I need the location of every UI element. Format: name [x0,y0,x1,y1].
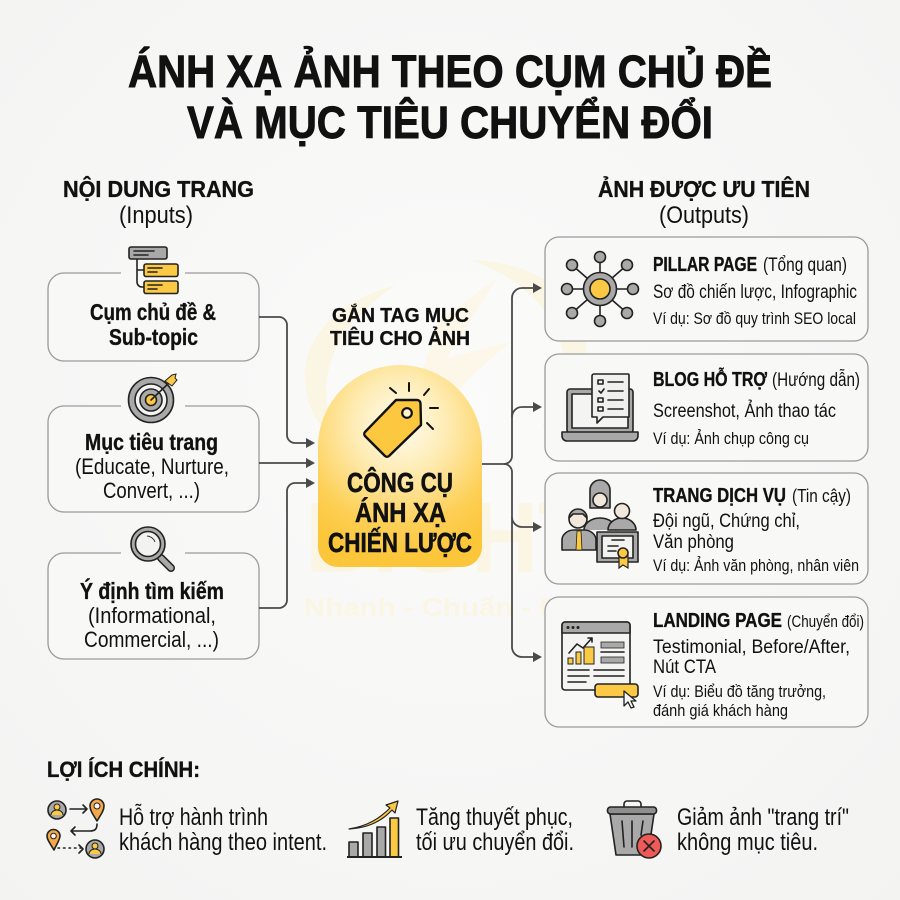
panel: page goal input [48,374,259,512]
panel: service page output: TRANG DỊCH VỤ [653,485,786,507]
panel: service page output: (Tin cậy) [792,486,851,506]
benefit: less decorative images: Giảm ảnh "trang trí" [677,804,849,831]
heading: key benefits: LỢI ÍCH CHÍNH: [47,757,200,782]
benefit: customer journey: khách hàng theo intent. [119,829,327,856]
benefit: conversion: tối ưu chuyển đổi. [416,829,574,856]
title: ÁNH XẠ ẢNH THEO CỤM CHỦ ĐỀ [128,46,772,97]
arrow: inputs to center [259,317,315,608]
panel: pillar page output [545,237,868,341]
icon: web page with chart and button [562,622,638,708]
heading: outputs: (Outputs) [659,202,749,229]
panel: support blog output: (Hướng dẫn) [772,369,860,391]
panel: central mapping tool: CHIẾN LƯỢC [328,527,472,558]
icon: team and certificate [562,480,638,568]
icon: hub network [562,252,638,326]
panel: service page output: Văn phòng [653,532,734,553]
icon: trash bin with cross [608,801,661,858]
panel: support blog output: Screenshot, Ảnh thao tác [653,400,836,422]
icon: hierarchy [129,247,178,294]
panel: landing page output: Ví dụ: Biểu đồ tăng trưởng, [653,682,826,701]
panel: topic cluster input: Sub-topic [109,324,198,350]
panel: support blog output [545,354,868,461]
panel: support blog output: BLOG HỖ TRỢ [653,367,768,391]
benefit: conversion [347,801,574,857]
arrow: center to outputs [482,283,542,662]
icon: journey route [47,799,104,858]
benefit: conversion: Tăng thuyết phục, [416,804,573,831]
panel: landing page output: LANDING PAGE [653,610,782,632]
label: tag goal: GẮN TAG MỤC [332,303,469,327]
panel: service page output: Ví dụ: Ảnh văn phòng, nhân viên [653,556,859,575]
heading: inputs [63,175,254,229]
benefit: less decorative images [608,801,849,858]
watermark logo: Nhanh - Chuẩn - Đẹp [304,594,595,622]
heading: inputs: NỘI DUNG TRANG [63,175,254,202]
panel: topic cluster input: Cụm chủ đề & [90,299,216,325]
panel: search intent input: Ý định tìm kiếm [80,577,224,604]
panel: landing page output: Testimonial, Before/After, [653,637,850,658]
panel: search intent input [48,527,259,659]
panel: pillar page output: Sơ đồ chiến lược, Infographic [653,282,857,303]
panel: service page output: Đội ngũ, Chứng chỉ, [653,511,800,532]
icon: growth chart [347,801,402,857]
panel: central mapping tool: CÔNG CỤ [347,466,453,498]
panel: support blog output: Ví dụ: Ảnh chụp công cụ [653,429,809,448]
panel: page goal input: Convert, ...) [103,478,200,503]
heading: outputs: ẢNH ĐƯỢC ƯU TIÊN [598,174,810,202]
panel: central mapping tool [318,365,482,567]
label: tag goal: TIÊU CHO ẢNH [330,326,470,350]
panel: topic cluster input [48,247,259,361]
panel: pillar page output: PILLAR PAGE [653,254,757,276]
panel: page goal input: Mục tiêu trang [85,429,218,455]
watermark logo [304,260,595,622]
benefit: customer journey [47,799,327,858]
panel: page goal input: (Educate, Nurture, [75,454,229,479]
panel: landing page output [545,597,868,727]
benefit: customer journey: Hỗ trợ hành trình [119,804,268,831]
panel: landing page output: (Chuyển đổi) [787,612,864,631]
panel: service page output [545,473,868,584]
heading: inputs: (Inputs) [119,202,193,229]
heading: outputs [598,174,810,229]
icon: price tag [364,383,438,457]
title: VÀ MỤC TIÊU CHUYỂN ĐỔI [187,97,713,148]
panel: pillar page output: (Tổng quan) [763,255,847,276]
watermark logo: BIGHT [305,482,595,594]
panel: central mapping tool: ÁNH XẠ [355,497,446,528]
panel: landing page output: đánh giá khách hàng [653,701,788,720]
title [128,46,772,148]
icon: target [128,374,177,422]
panel: pillar page output: Ví dụ: Sơ đồ quy trình SEO local [653,309,856,328]
benefit: less decorative images: không mục tiêu. [677,829,818,856]
panel: landing page output: Nút CTA [653,657,716,678]
icon: laptop with checklist [562,374,638,441]
panel: search intent input: (Informational, [88,603,216,628]
icon: magnifier [131,527,171,568]
label: tag goal [330,303,470,350]
panel: search intent input: Commercial, ...) [84,627,219,652]
